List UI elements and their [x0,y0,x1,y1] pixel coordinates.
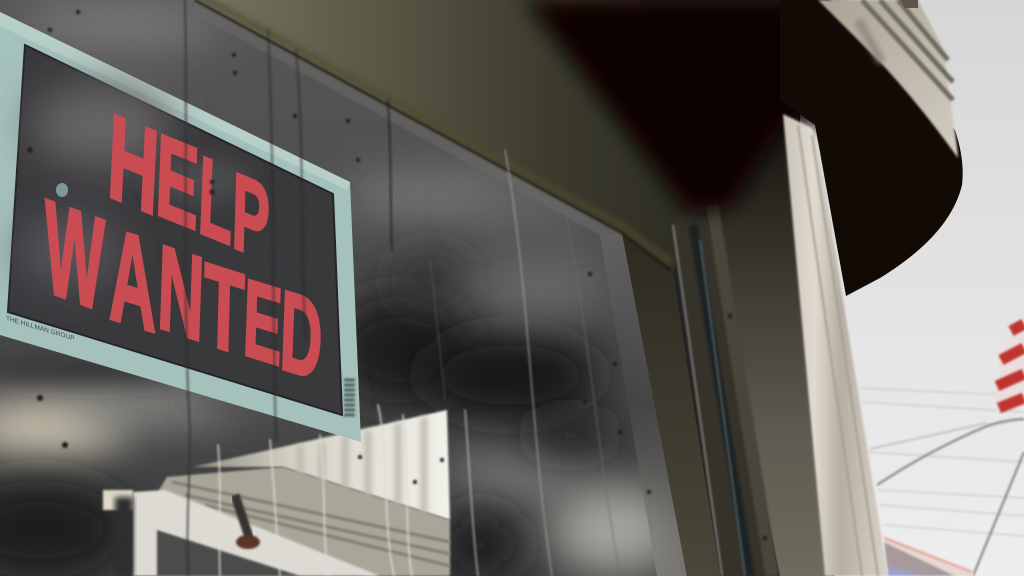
upper wall [195,0,700,272]
dark soffit [525,0,840,215]
distant rooftop [884,536,975,576]
sign word: WANTED: N [156,220,206,368]
window glass [0,0,687,576]
rain streaks on glass [185,0,620,576]
canopy underside [780,0,963,296]
sign word: WANTED: A [109,201,156,361]
sign black panel [8,45,342,415]
sign word: HELP [105,89,271,285]
barcode [344,380,355,415]
building reflection [48,410,450,576]
window top seal line [195,0,670,270]
sign word: WANTED: E [241,255,284,389]
help wanted sign [0,12,361,442]
window frame [622,202,780,576]
sign word: HELP: E [154,110,201,256]
window top edge strip [195,0,622,235]
sky [800,0,1024,576]
droplet highlight [56,183,68,197]
inner window strip [600,233,687,576]
rain droplets [28,10,767,540]
light metal pillar strip [783,114,888,576]
pillar [690,100,835,576]
sign word: WANTED: D [278,267,324,406]
sign word: WANTED: T [202,239,246,381]
sign word: WANTED [43,173,324,406]
american flag [993,316,1024,414]
sign maker imprint: THE HILLMAN GROUP [6,315,75,343]
sign word: WANTED: W [43,173,106,341]
sign word: HELP: L [196,132,235,269]
sign word: HELP: P [230,149,271,285]
sign word: HELP: H [105,89,162,242]
sign card [0,12,361,442]
overhead wires [860,388,1024,576]
cloud reflections in glass [0,3,680,576]
canopy rim [818,0,958,158]
